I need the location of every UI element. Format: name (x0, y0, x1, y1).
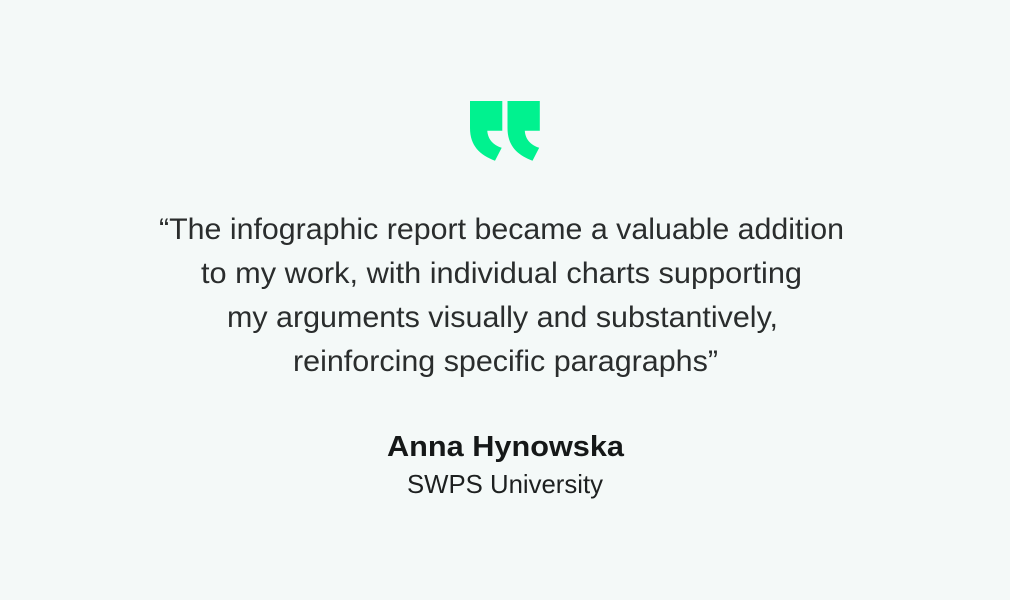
quote text: my arguments visually and substantively, (227, 301, 778, 334)
icon: quotation marks (470, 101, 540, 161)
quote text: “The infographic report became a valuable addition (159, 213, 844, 246)
author name: Anna Hynowska (387, 431, 625, 463)
quote text (159, 213, 844, 378)
quote text: reinforcing specific paragraphs” (293, 345, 718, 378)
author affiliation: SWPS University (407, 469, 603, 499)
quote text: to my work, with individual charts supporting (201, 257, 802, 290)
